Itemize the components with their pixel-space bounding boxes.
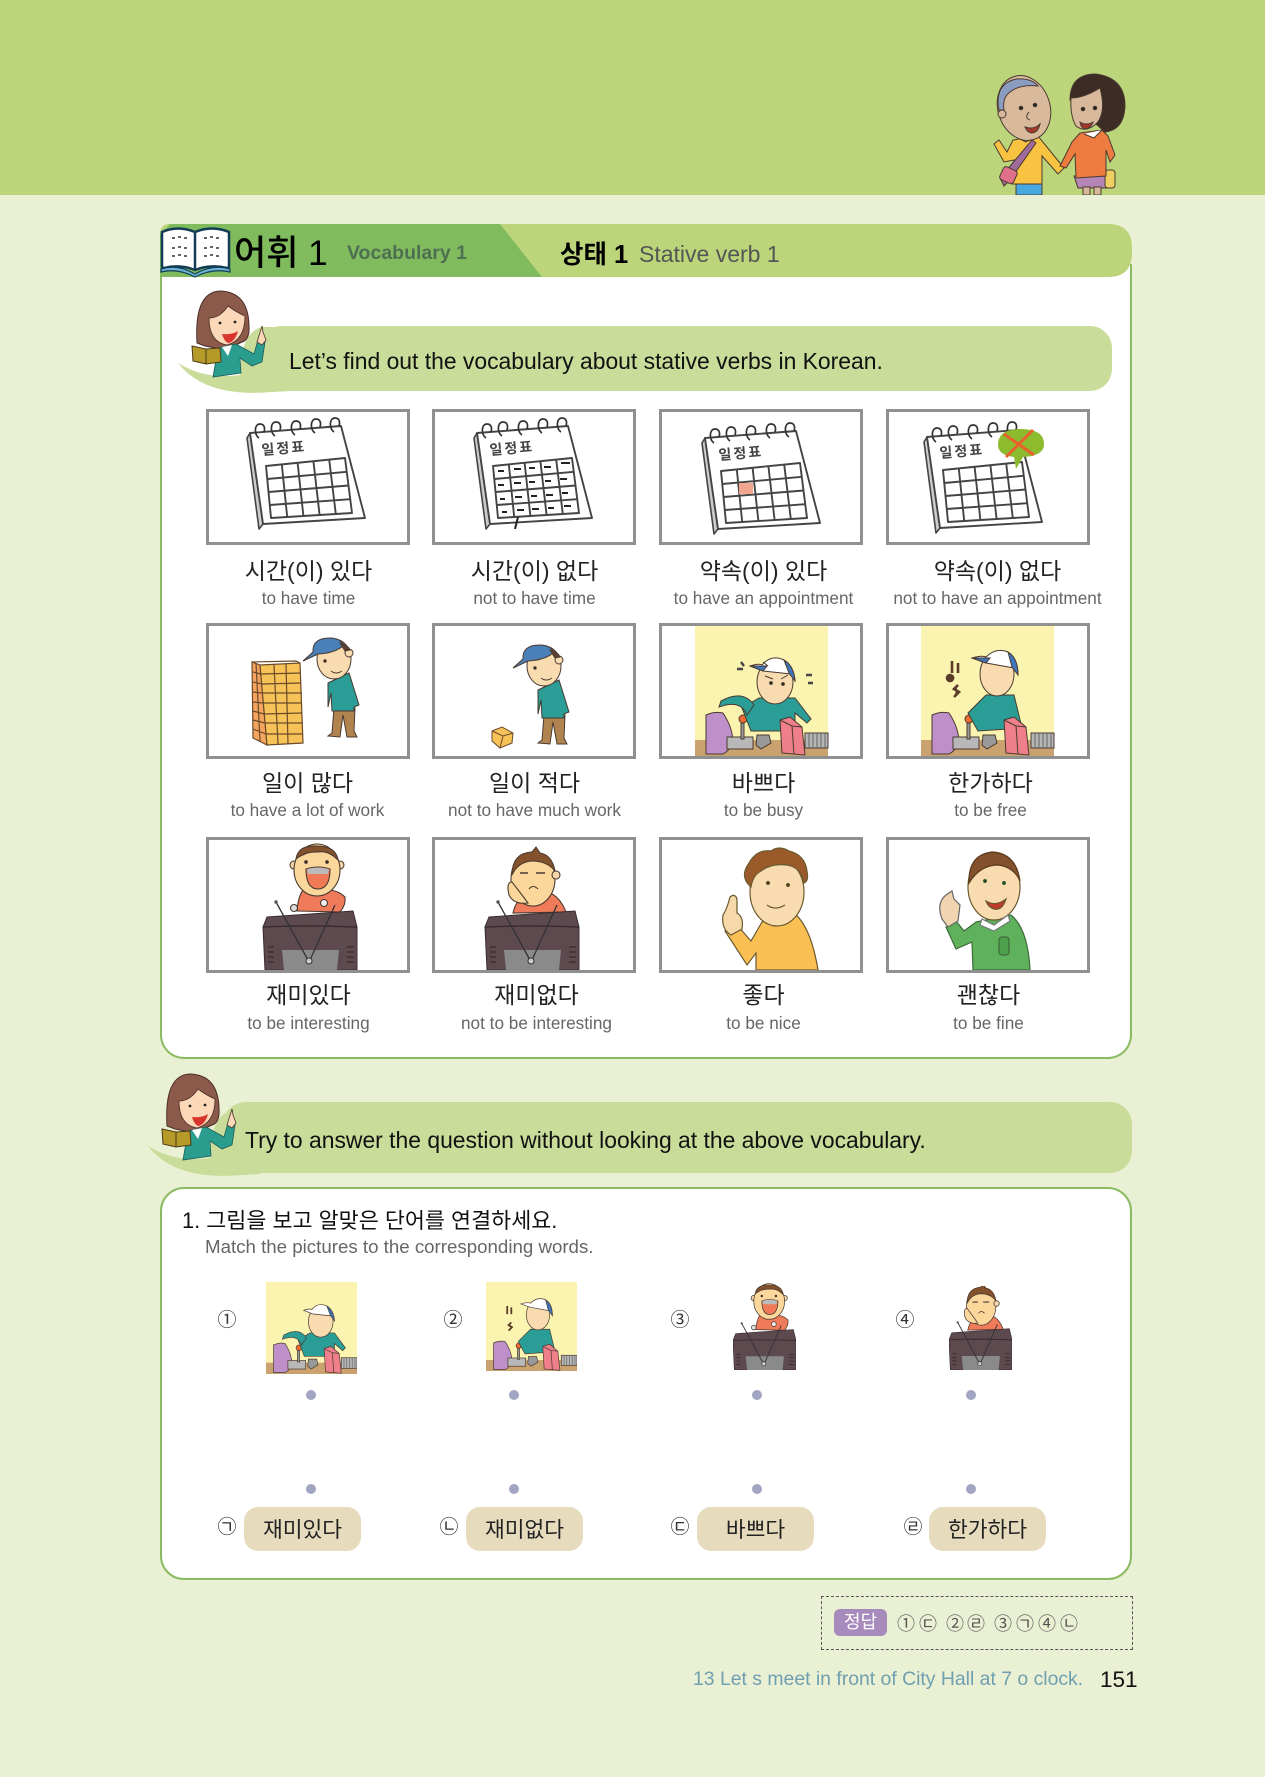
panel: matching exercise (160, 1187, 1132, 1580)
answers: ③ (994, 1614, 1012, 1634)
picture: okay hand sign (886, 837, 1090, 973)
word option 재미없다 (466, 1507, 583, 1551)
teacher illustration (178, 290, 289, 393)
English meaning: to be busy (724, 800, 803, 820)
vocabulary item: 괜찮다 (886, 837, 1090, 1033)
Korean word: 약속(이) 있다 (700, 558, 827, 584)
vocabulary item: 좋다 (659, 837, 863, 1033)
vocabulary item: 바쁘다 (659, 623, 863, 820)
picture: busy factory worker (659, 623, 863, 759)
picture: full schedule (432, 409, 636, 545)
bubble background (222, 1102, 1132, 1173)
answer box (821, 1596, 1133, 1650)
exercise question in English: Match the pictures to the corresponding words. (205, 1236, 594, 1257)
English meaning: not to have time (473, 588, 596, 608)
picture: full schedule: 일정표 (489, 436, 535, 460)
English meaning: to be nice (726, 1013, 801, 1033)
panel: vocabulary (160, 224, 1132, 1059)
picture: thumbs up (659, 837, 863, 973)
vocabulary item: 일이 많다 (206, 623, 410, 820)
instruction bubble (258, 326, 1112, 391)
answers: ② (946, 1614, 964, 1634)
vocabulary item: 재미있다 (206, 837, 410, 1033)
icon: open book (160, 227, 231, 278)
answers: ④ (1038, 1614, 1056, 1634)
answers: ㉣ (967, 1614, 985, 1634)
English meaning: to have time (262, 588, 355, 608)
word option 바쁘다: 바쁘다 (726, 1518, 785, 1542)
word option 한가하다 (929, 1507, 1046, 1551)
word option 한가하다: 한가하다 (948, 1518, 1027, 1542)
Korean word: 일이 많다 (262, 770, 353, 796)
vocabulary item: 시간 없다 (432, 409, 636, 608)
English meaning: to be free (954, 800, 1027, 820)
vocabulary item: 한가하다 (886, 623, 1090, 820)
vocabulary item: 시간 있다 (206, 409, 410, 608)
number 4: ④ (895, 1310, 914, 1331)
option label ㉣: ㉣ (903, 1517, 922, 1538)
English meaning: not to have an appointment (893, 588, 1102, 608)
answer badge: 정답 (844, 1612, 877, 1632)
option label ㉠: ㉠ (217, 1517, 236, 1538)
picture: schedule with appointment (659, 409, 863, 545)
picture: relaxed factory worker (886, 623, 1090, 759)
footer chapter title: 13 Let s meet in front of City Hall at 7 o clock. (693, 1668, 1083, 1690)
vocabulary item: 약속 있다 (659, 409, 863, 608)
Korean word: 좋다 (742, 982, 785, 1008)
answers: ① (897, 1614, 915, 1634)
Korean word: 괜찮다 (957, 982, 1020, 1008)
word option 재미있다 (244, 1507, 361, 1551)
teacher illustration (148, 1074, 260, 1176)
exercise question: 1. 그림을 보고 알맞은 단어를 연결하세요. (182, 1208, 557, 1233)
Korean word: 약속(이) 없다 (934, 558, 1061, 584)
English meaning: not to be interesting (461, 1013, 612, 1033)
answer badge (834, 1609, 887, 1636)
English meaning: to be fine (953, 1013, 1024, 1033)
option label ㉡: ㉡ (439, 1517, 458, 1538)
option label ㉢: ㉢ (670, 1517, 690, 1538)
English meaning: to have a lot of work (231, 800, 384, 820)
exercise picture: laughing boy (733, 1283, 796, 1370)
word option 재미있다: 재미있다 (263, 1518, 342, 1542)
picture: boy laughing at TV (206, 837, 410, 973)
page number: 151 (1100, 1667, 1138, 1692)
answers: ㉠ (1016, 1614, 1034, 1634)
English meaning: to have an appointment (674, 588, 853, 608)
topic heading: 상태 1 (560, 241, 628, 269)
word option 바쁘다 (697, 1507, 814, 1551)
Korean word: 재미있다 (266, 982, 351, 1008)
header bar (160, 224, 1132, 277)
word option 재미없다: 재미없다 (485, 1518, 564, 1542)
top header band (0, 0, 1265, 195)
answers: ㉢ (919, 1614, 937, 1634)
section title: 어휘 1 (234, 234, 328, 273)
English meaning: not to have much work (448, 800, 621, 820)
picture: schedule with appointment: 일정표 (718, 441, 764, 465)
instruction text: Try to answer the question without looking at the above vocabulary. (245, 1127, 926, 1153)
topic English: Stative verb 1 (639, 241, 780, 267)
matching dots top (306, 1390, 976, 1494)
vocabulary item: 일이 적다 (432, 623, 636, 820)
picture: empty schedule: 일정표 (261, 436, 307, 460)
Korean word: 한가하다 (948, 770, 1033, 796)
Korean word: 일이 적다 (489, 770, 580, 796)
Korean word: 바쁘다 (732, 770, 795, 796)
instruction text: Let’s find out the vocabulary about stative verbs in Korean. (289, 348, 883, 374)
Korean word: 시간(이) 있다 (245, 558, 372, 584)
picture: tall stack of boxes and man (206, 623, 410, 759)
Korean word: 재미없다 (494, 982, 579, 1008)
Korean word: 시간(이) 없다 (471, 558, 598, 584)
number 2: ② (443, 1310, 462, 1331)
number 1: ① (217, 1310, 236, 1331)
number 3: ③ (670, 1310, 690, 1331)
exercise picture: relaxed worker (486, 1282, 577, 1371)
answers: ㉡ (1060, 1614, 1078, 1634)
panel body (160, 264, 1132, 1059)
answers (897, 1614, 1078, 1634)
practice instruction bubble (148, 1074, 1132, 1176)
picture: empty schedule (206, 409, 410, 545)
picture: boy bored at TV (432, 837, 636, 973)
picture: schedule with cancelled appointment: 일정표 (939, 439, 985, 463)
exercise picture: busy worker (266, 1282, 357, 1374)
picture: schedule with cancelled appointment (886, 409, 1090, 545)
picture: small box and man (432, 623, 636, 759)
vocabulary item: 재미없다 (432, 837, 636, 1033)
English meaning: to be interesting (247, 1013, 370, 1033)
icon: older couple holding hands (993, 74, 1126, 195)
section subtitle: Vocabulary 1 (347, 242, 467, 264)
vocabulary item: 약속 없다 (886, 409, 1102, 608)
exercise picture: bored boy (949, 1286, 1012, 1370)
